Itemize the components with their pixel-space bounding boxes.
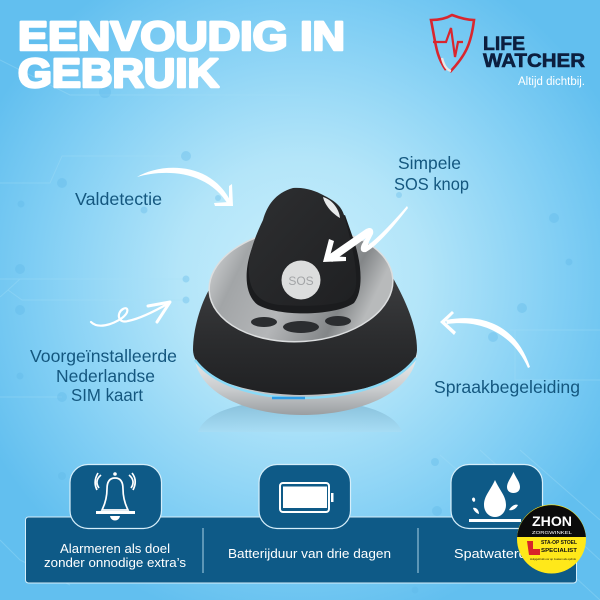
text: alarm: Alarmeren als doel	[60, 541, 170, 556]
arrow: Spraakbegeleiding	[440, 311, 530, 368]
label: Simpele SOS knop	[394, 153, 469, 194]
label: Voorgeinstalleerde Nederlandse SIM kaart: Voorgeïnstalleerde	[30, 346, 177, 366]
logo wordmark: LIFE	[483, 34, 525, 55]
panel bar	[26, 517, 576, 583]
label: Voorgeinstalleerde Nederlandse SIM kaart: SIM kaart	[71, 385, 143, 405]
text: alarm: zonder onnodige extra’s	[44, 555, 187, 570]
icon tile: water	[451, 464, 542, 528]
text: splash: Spatwaterdicht	[454, 546, 549, 561]
badge text	[541, 540, 578, 554]
arrow: SOS knop	[323, 206, 408, 262]
label: Simpele SOS knop: SOS knop	[394, 174, 469, 194]
label: Voorgeinstalleerde Nederlandse SIM kaart: Nederlandse	[56, 366, 155, 386]
icon tile: bell	[70, 464, 162, 528]
cradle	[247, 215, 361, 313]
dome body	[193, 278, 417, 395]
badge: ZHON Zorgwinkel: Hulpgebruik oor op zoeken als opdruk	[530, 557, 576, 561]
pendant loop	[323, 197, 340, 218]
logo wordmark	[483, 34, 585, 72]
icon tile: battery	[259, 464, 350, 528]
text: alarm	[44, 541, 187, 570]
logo: Life Watcher	[431, 15, 585, 88]
pendant	[249, 188, 356, 306]
label: Voorgeinstalleerde Nederlandse SIM kaart	[30, 346, 177, 405]
circuit nodes	[15, 86, 572, 594]
base reflection	[198, 400, 402, 432]
badge text: STA-OP STOEL	[541, 540, 578, 546]
card: alarm	[44, 464, 187, 570]
logo wordmark: WATCHER	[483, 51, 585, 72]
badge: ZHON Zorgwinkel	[517, 504, 586, 574]
card: battery	[228, 464, 391, 561]
product: SOS base station with pendant: SOS	[288, 274, 314, 288]
label: Valdetectie: Valdetectie	[75, 189, 162, 209]
badge name: ZHON	[532, 514, 572, 529]
arrow: Valdetectie	[137, 168, 233, 206]
badge text: SPECIALIST	[541, 548, 578, 554]
logo tagline: Altijd dichtbij.	[518, 76, 585, 88]
product: SOS base station with pendant	[193, 188, 417, 432]
divider	[202, 528, 204, 573]
blue light ring	[195, 358, 416, 398]
control buttons	[251, 317, 277, 327]
title	[18, 13, 345, 96]
icon: water drops	[469, 472, 521, 522]
badge: ZHON Zorgwinkel: ZORGWINKEL	[532, 530, 573, 535]
arrow: SIM kaart	[91, 302, 170, 326]
SOS button	[282, 260, 320, 300]
title: EENVOUDIG IN	[18, 13, 345, 59]
bottom feature panel	[26, 464, 576, 583]
base underside	[194, 352, 417, 415]
icon: bell	[95, 472, 135, 520]
icon: shield with heartbeat	[431, 15, 474, 72]
label: Spraakbegeleiding: Spraakbegeleiding	[434, 377, 580, 397]
card: splash	[451, 464, 549, 561]
text: battery: Batterijduur van drie dagen	[228, 546, 391, 561]
title: GEBRUIK	[18, 50, 219, 96]
icon: battery	[280, 483, 334, 512]
badge icon: chair	[527, 541, 540, 555]
label: Simpele SOS knop: Simpele	[398, 153, 461, 173]
silver ring	[205, 222, 397, 348]
divider	[418, 528, 419, 573]
